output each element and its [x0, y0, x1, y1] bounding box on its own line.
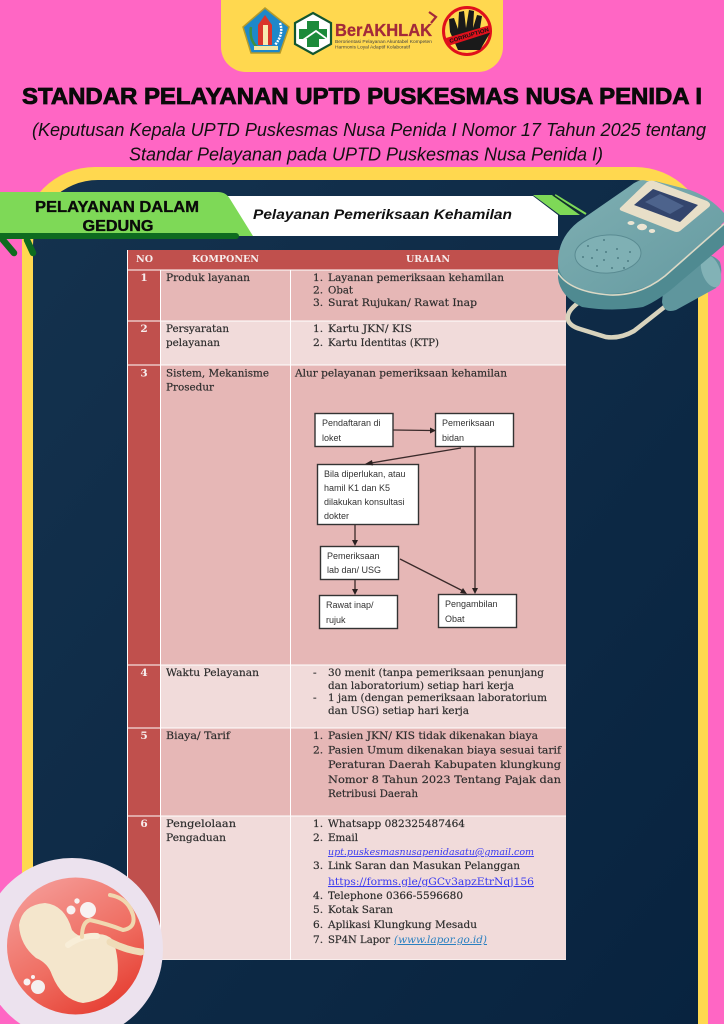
- flow box: pendaftaran: [315, 414, 393, 446]
- device upper body: [558, 180, 724, 294]
- table header: KOMPONEN: [192, 254, 259, 265]
- row 6: pengelolaan pengaduan: 5.: [313, 904, 323, 916]
- row 5: biaya / tarif: 5: [140, 730, 148, 742]
- icon: BerAKHLAK logo: [335, 12, 436, 50]
- flow box: pengambilan obat: [438, 594, 516, 628]
- arrow: bidan to obat: [472, 447, 478, 594]
- icon: BerAKHLAK logo: BerAKHLAK: [335, 20, 432, 40]
- row 6: pengelolaan pengaduan: Aplikasi Klungkung Mesadu: [327, 919, 477, 931]
- row 1: produk layanan: 1: [140, 272, 148, 284]
- row 1: produk layanan: Produk layanan: [166, 272, 250, 284]
- flow box: pengambilan obat: Pengambilan: [445, 599, 498, 609]
- panel: logo tab: [221, 0, 503, 72]
- arrow: pendaftaran to bidan: [393, 428, 436, 434]
- row 2: persyaratan pelayanan: 2: [140, 323, 148, 335]
- title: STANDAR PELAYANAN UPTD PUSKESMAS NUSA PENIDA I: [22, 83, 702, 109]
- row 3: sistem, mekanisme, prosedur: Alur pelayanan pemeriksaan kehamilan: [294, 368, 507, 380]
- flow box: pengambilan obat: Obat: [445, 614, 465, 624]
- row 6: pengelolaan pengaduan: Whatsapp 082325487464: [328, 818, 465, 830]
- row 5: biaya / tarif: 2.: [313, 744, 323, 756]
- subtitle: [32, 120, 706, 164]
- flow box: lab dan USG: Pemeriksaan: [327, 551, 380, 561]
- flow box: konsultasi dokter: Bila diperlukan, atau: [324, 469, 406, 479]
- flow box: konsultasi dokter: [318, 464, 418, 524]
- row 2: persyaratan pelayanan: Kartu Identitas (KTP): [328, 337, 439, 349]
- row 3: sistem, mekanisme, prosedur: Prosedur: [166, 382, 215, 394]
- icon: no corruption hand: CORRUPTION: [449, 27, 490, 45]
- flow box: konsultasi dokter: dokter: [324, 511, 349, 521]
- row 6: pengelolaan pengaduan: 7.: [313, 934, 323, 946]
- row 2: persyaratan pelayanan: Kartu JKN/ KIS: [328, 323, 412, 335]
- row 2: persyaratan pelayanan: 2.: [313, 337, 323, 349]
- row 5: biaya / tarif: Retribusi Daerah: [328, 788, 418, 800]
- row 4: waktu pelayanan: -: [313, 692, 317, 704]
- row 6: pengelolaan pengaduan: Link Saran dan Masukan Pelanggan: [328, 860, 520, 872]
- table header: URAIAN: [406, 254, 450, 265]
- icon: Klungkung regency crest: [243, 8, 289, 53]
- row 2: persyaratan pelayanan: Persyaratan: [166, 323, 229, 335]
- row 1: produk layanan: 1.: [313, 272, 323, 284]
- row 4: waktu pelayanan: Waktu Pelayanan: [166, 667, 259, 679]
- table header: NO: [136, 254, 153, 265]
- row 6: pengelolaan pengaduan: [128, 816, 566, 960]
- row 4: waktu pelayanan: [128, 666, 566, 728]
- row 4: waktu pelayanan: 4: [140, 667, 148, 679]
- arrow: konsultasi to lab: [352, 525, 358, 546]
- row 2: persyaratan pelayanan: pelayanan: [166, 337, 220, 349]
- flow box: rawat inap: Rawat inap/: [326, 600, 374, 610]
- row 5: biaya / tarif: 1.: [313, 730, 323, 742]
- row 6: pengelolaan pengaduan: 1.: [313, 818, 323, 830]
- row 2: persyaratan pelayanan: [128, 322, 566, 364]
- row 6: pengelolaan pengaduan: 3.: [313, 860, 323, 872]
- row 3: sistem, mekanisme, prosedur: Sistem, Mekanisme: [166, 368, 269, 380]
- row 5: biaya / tarif: Pasien JKN/ KIS tidak dikenakan biaya: [328, 730, 539, 742]
- arrow: lab to rawat inap: [352, 580, 358, 595]
- flow box: konsultasi dokter: hamil K1 dan K5: [324, 483, 390, 493]
- flow box: rawat inap: rujuk: [326, 615, 346, 625]
- device lower body: [558, 225, 724, 310]
- buttons: [628, 221, 634, 225]
- section banner: category ribbon: [0, 192, 253, 253]
- row 3: sistem, mekanisme, prosedur: 3: [140, 368, 148, 380]
- row 6: pengelolaan pengaduan: Telephone 0366-5596680: [328, 890, 463, 902]
- flow box: pemeriksaan bidan: Pemeriksaan: [442, 418, 495, 428]
- speaker: [574, 233, 642, 275]
- row 4: waktu pelayanan: 1 jam (dengan pemeriksaan laboratorium: [328, 692, 547, 704]
- flow box: pendaftaran: loket: [322, 433, 342, 443]
- row 6: pengelolaan pengaduan: 6: [140, 818, 148, 830]
- icon: BerAKHLAK logo: Harmonis Loyal Adaptif Kolaboratif: [335, 44, 411, 50]
- icon: health service hexagon: [295, 13, 331, 54]
- row 5: biaya / tarif: Nomor 8 Tahun 2023 Tentang Pajak dan: [328, 774, 561, 786]
- section banner: service title: Pelayanan Pemeriksaan Kehamilan: [253, 206, 512, 222]
- icon: fetal doppler device: [558, 180, 724, 337]
- table header: [128, 250, 566, 270]
- row 4: waktu pelayanan: dan laboratorium) setiap hari kerja: [328, 680, 515, 692]
- row 4: waktu pelayanan: -: [313, 667, 317, 679]
- flow box: lab dan USG: [320, 546, 398, 580]
- row 3: sistem, mekanisme, prosedur: [128, 366, 566, 664]
- flow box: lab dan USG: lab dan/ USG: [327, 565, 381, 575]
- row 6: pengelolaan pengaduan: 2.: [313, 832, 323, 844]
- panel: main background: [22, 167, 708, 1024]
- probe cylinder: [662, 255, 721, 311]
- row 6: pengelolaan pengaduan: upt.puskesmasnusapenidasatu@gmail.com: [328, 847, 534, 858]
- row 1: produk layanan: Obat: [328, 284, 354, 296]
- row 1: produk layanan: 2.: [313, 284, 323, 296]
- row 1: produk layanan: 3.: [313, 297, 323, 309]
- flow box: pemeriksaan bidan: [436, 414, 514, 446]
- arrow: bidan to konsultasi: [365, 448, 461, 466]
- icon: fetus in womb circle: [0, 858, 163, 1024]
- row 6: pengelolaan pengaduan: Email: [328, 832, 359, 844]
- subtitle: (Keputusan Kepala UPTD Puskesmas Nusa Penida I Nomor 17 Tahun 2025 tentang: [32, 120, 706, 140]
- row 6: pengelolaan pengaduan: 6.: [313, 919, 323, 931]
- icon: BerAKHLAK logo: Berorientasi Pelayanan Akuntabel Kompeten: [335, 39, 433, 44]
- row 1: produk layanan: Layanan pemeriksaan kehamilan: [328, 272, 504, 284]
- table: [127, 250, 566, 960]
- row 2: persyaratan pelayanan: 1.: [313, 323, 323, 335]
- row 4: waktu pelayanan: 30 menit (tanpa pemeriksaan penunjang: [328, 667, 544, 679]
- section banner: service title: [225, 195, 586, 236]
- flow box: konsultasi dokter: dilakukan konsultasi: [324, 497, 405, 507]
- row 6: pengelolaan pengaduan: Pengelolaan: [166, 818, 236, 830]
- row 6: pengelolaan pengaduan: Kotak Saran: [328, 904, 393, 916]
- section banner: category ribbon: GEDUNG: [82, 218, 154, 235]
- row 5: biaya / tarif: Peraturan Daerah Kabupaten klungkung: [328, 759, 561, 771]
- arrow: lab to obat: [400, 559, 467, 594]
- flow box: pendaftaran: Pendaftaran di: [322, 418, 381, 428]
- row 1: produk layanan: Surat Rujukan/ Rawat Inap: [328, 297, 477, 309]
- row 6: pengelolaan pengaduan: Pengaduan: [166, 832, 226, 844]
- flow box: pemeriksaan bidan: bidan: [442, 433, 464, 443]
- row 5: biaya / tarif: Biaya/ Tarif: [166, 730, 231, 742]
- section banner: category ribbon: PELAYANAN DALAM: [35, 199, 199, 216]
- row 5: biaya / tarif: Pasien Umum dikenakan biaya sesuai tarif: [328, 744, 562, 756]
- row 6: pengelolaan pengaduan: (www.lapor.go.id): [394, 935, 487, 946]
- icon: no corruption hand: [444, 8, 492, 54]
- cable: [568, 303, 667, 337]
- flowchart: [315, 414, 516, 628]
- row 1: produk layanan: [128, 270, 566, 320]
- row 4: waktu pelayanan: dan USG) setiap hari kerja: [328, 705, 470, 717]
- row 5: biaya / tarif: [128, 728, 566, 816]
- row 6: pengelolaan pengaduan: SP4N Lapor: [328, 934, 391, 946]
- row 6: pengelolaan pengaduan: https://forms.gle/gGCv3apzEtrNqj156: [328, 876, 534, 888]
- subtitle: Standar Pelayanan pada UPTD Puskesmas Nusa Penida I): [129, 144, 603, 164]
- row 6: pengelolaan pengaduan: 4.: [313, 890, 323, 902]
- flow box: rawat inap: [320, 596, 398, 628]
- screen: [620, 181, 710, 232]
